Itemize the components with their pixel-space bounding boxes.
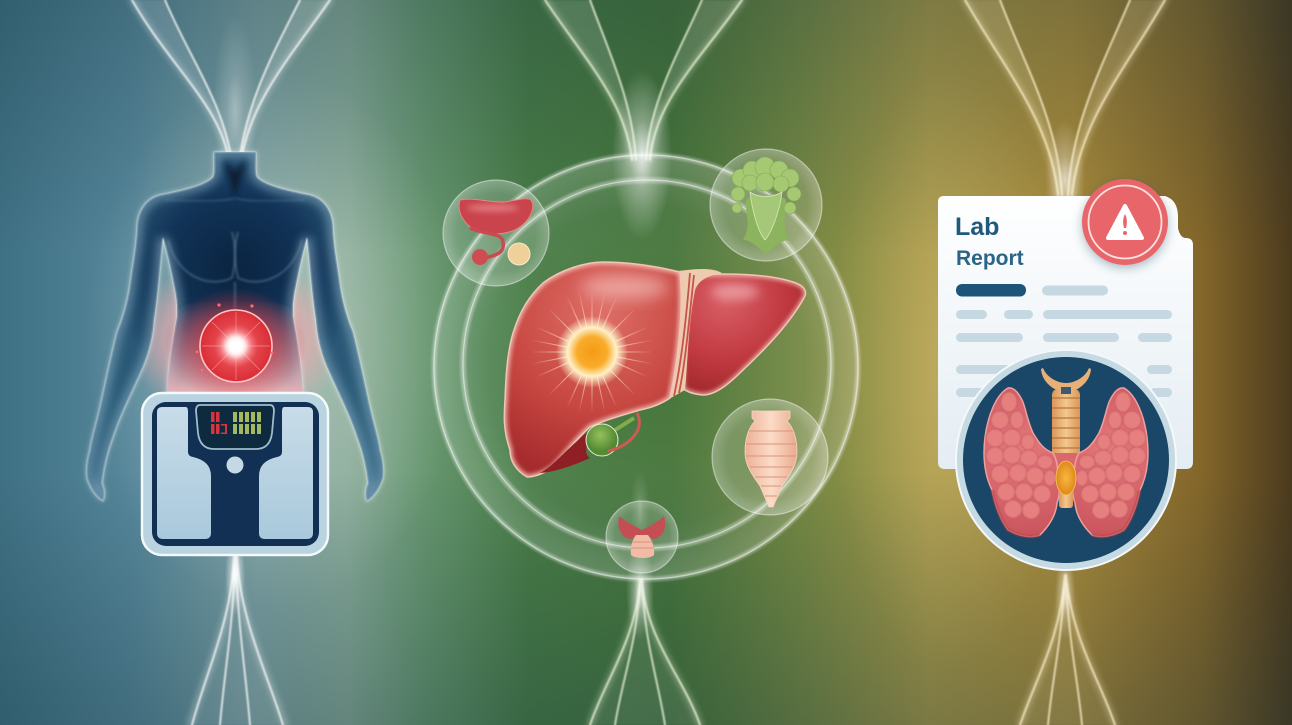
right lobe <box>683 274 806 395</box>
heading: Lab: Lab <box>955 213 999 241</box>
gallbladder <box>586 413 639 456</box>
sunburst on liver <box>531 291 653 413</box>
panel: liver with surrounding organ bubbles <box>433 149 859 580</box>
lower trachea <box>1059 487 1073 508</box>
panel: human body with abdominal glow and scale <box>87 152 383 555</box>
red inflamed sphere <box>196 303 273 382</box>
ligament <box>669 269 722 399</box>
icon: alert badge <box>1082 179 1168 265</box>
right thyroid lobe <box>1073 388 1148 537</box>
red abdominal halo <box>166 288 306 404</box>
body silhouette <box>87 152 383 501</box>
bubble: ribbed intestine organ <box>712 399 828 515</box>
bathroom scale <box>142 393 328 555</box>
pink waist glow <box>124 260 348 420</box>
liver <box>504 262 806 477</box>
panel: lab report document <box>938 179 1193 571</box>
left thyroid lobe <box>984 388 1059 537</box>
concentric rings <box>433 154 859 580</box>
neck shadow <box>224 160 246 198</box>
orange isthmus nodule <box>1056 461 1076 495</box>
report data bars <box>956 284 1172 397</box>
trachea <box>1041 368 1091 465</box>
bubble: small thyroid organ <box>606 501 678 573</box>
left lobe <box>504 262 681 477</box>
heading: Report: Report <box>956 247 1024 270</box>
highlights <box>581 275 669 299</box>
bubble: green organ <box>710 149 822 261</box>
energy streams: left <box>132 0 330 725</box>
bubble: spleen and stomach organ <box>443 180 549 286</box>
energy streams: right <box>965 0 1165 725</box>
lower torso fade <box>167 300 303 395</box>
report sheet <box>938 196 1193 469</box>
under-liver shadow <box>540 430 590 473</box>
isthmus bridge <box>1045 453 1087 497</box>
thyroid circle <box>955 349 1177 571</box>
chest contours <box>165 198 305 395</box>
energy streams: centre <box>545 0 742 725</box>
